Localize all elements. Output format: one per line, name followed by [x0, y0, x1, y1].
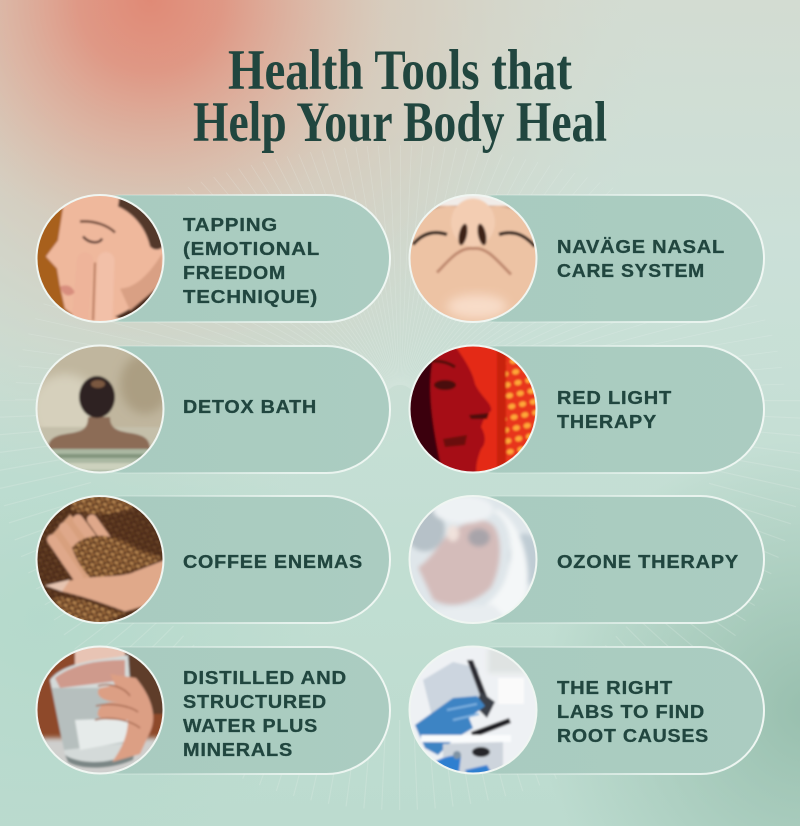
label: COFFEE ENEMAS [183, 552, 363, 572]
panel: red light therapy [407, 343, 764, 475]
label [183, 668, 347, 760]
label: THE RIGHT [557, 678, 673, 698]
label: DISTILLED AND [183, 668, 347, 688]
title: Help Your Body Heal [193, 91, 607, 154]
pill background [60, 647, 390, 774]
label: CARE SYSTEM [557, 261, 705, 281]
label: LABS TO FIND [557, 702, 705, 722]
panel: tapping [34, 192, 390, 328]
label [557, 237, 725, 281]
label: MINERALS [183, 740, 293, 760]
panel: ozone therapy [405, 494, 764, 626]
label: TECHNIQUE) [183, 287, 318, 307]
label: TAPPING [183, 215, 278, 235]
pill background [60, 346, 390, 473]
photo: hand holding a glass of water [34, 644, 166, 778]
photo: face lit by red light panel [407, 343, 539, 475]
label: RED LIGHT [557, 388, 672, 408]
panel: detox bath [30, 343, 390, 479]
photo: gloved hands using a microscope [407, 644, 539, 778]
pill background [434, 346, 764, 473]
title: Health Tools that [228, 39, 572, 102]
title [193, 39, 607, 154]
pill background [434, 195, 764, 322]
pill background [60, 496, 390, 623]
label: WATER PLUS [183, 716, 318, 736]
photo: upturned face with closed eyes [407, 192, 539, 328]
panel: navage nasal care system [407, 192, 764, 328]
photo: woman tapping her face [36, 194, 164, 323]
label [557, 678, 709, 746]
photo: hands holding coffee beans [34, 494, 166, 626]
pill background [434, 496, 764, 623]
label: ROOT CAUSES [557, 726, 709, 746]
photo: face in ozone steam [405, 494, 541, 626]
label [557, 388, 672, 432]
photo: woman in steaming bath [36, 344, 164, 474]
label [183, 215, 320, 307]
panel: the right labs [407, 644, 764, 778]
label: NAVÄGE NASAL [557, 237, 725, 257]
panel: coffee enemas [34, 494, 390, 626]
panel: distilled and structured water [34, 644, 390, 778]
label: STRUCTURED [183, 692, 327, 712]
pill background [60, 195, 390, 322]
pill background [434, 647, 764, 774]
label: OZONE THERAPY [557, 552, 739, 572]
label: THERAPY [557, 412, 657, 432]
label: FREEDOM [183, 263, 286, 283]
label: DETOX BATH [183, 397, 317, 417]
label: (EMOTIONAL [183, 239, 320, 259]
